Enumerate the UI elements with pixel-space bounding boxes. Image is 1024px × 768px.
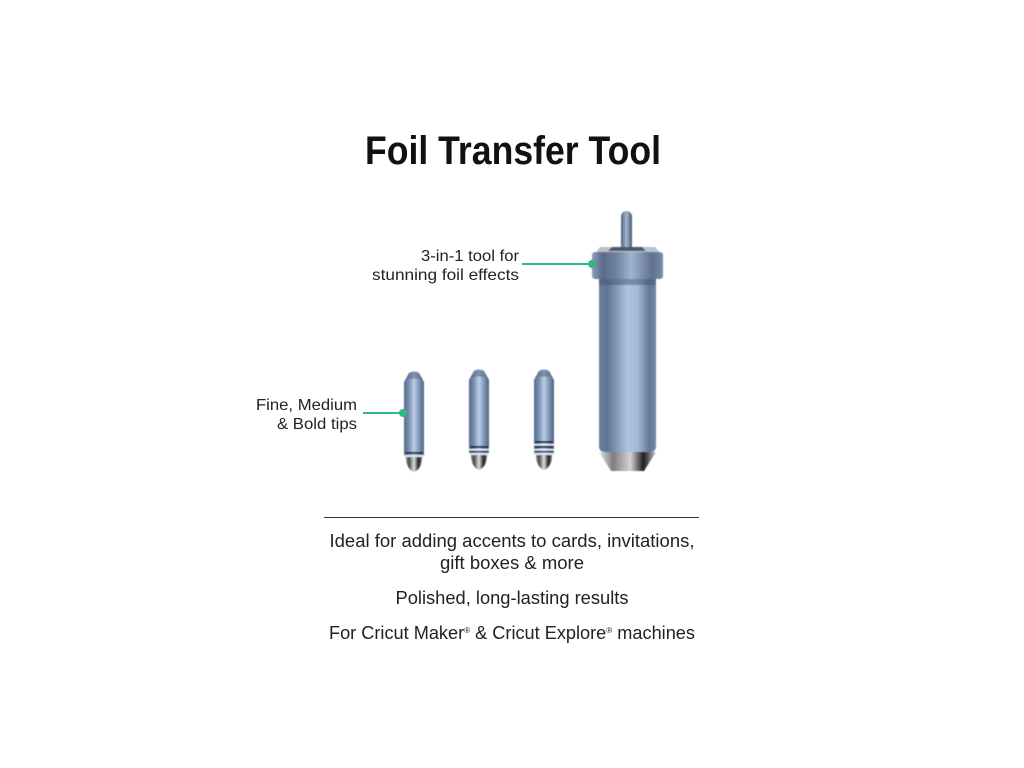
feature list: gift boxes & more: [440, 553, 584, 573]
callout: tips: [256, 397, 407, 433]
callout: 3-in-1 tool: [372, 248, 596, 284]
icon: fine tip: [404, 372, 424, 472]
callout: 3-in-1 tool: stunning foil effects: [372, 267, 519, 284]
feature list: [329, 531, 695, 643]
callout: tips: Fine, Medium: [256, 397, 357, 414]
icon: large foil transfer tool: [592, 211, 663, 471]
feature list: Ideal for adding accents to cards, invitations,: [330, 531, 694, 551]
title: Foil Transfer Tool: [365, 129, 661, 173]
feature list: For Cricut Maker: [329, 623, 463, 643]
feature list: & Cricut Explore: [470, 623, 606, 643]
feature list: ®: [606, 626, 612, 635]
callout: tips: & Bold tips: [277, 416, 357, 433]
feature list: Polished, long-lasting results: [396, 588, 628, 608]
icon: bold tip: [534, 370, 554, 470]
feature list: ®: [464, 626, 470, 635]
callout: 3-in-1 tool: 3-in-1 tool for: [421, 248, 520, 265]
feature list: machines: [612, 623, 695, 643]
icon: medium tip: [469, 370, 489, 470]
